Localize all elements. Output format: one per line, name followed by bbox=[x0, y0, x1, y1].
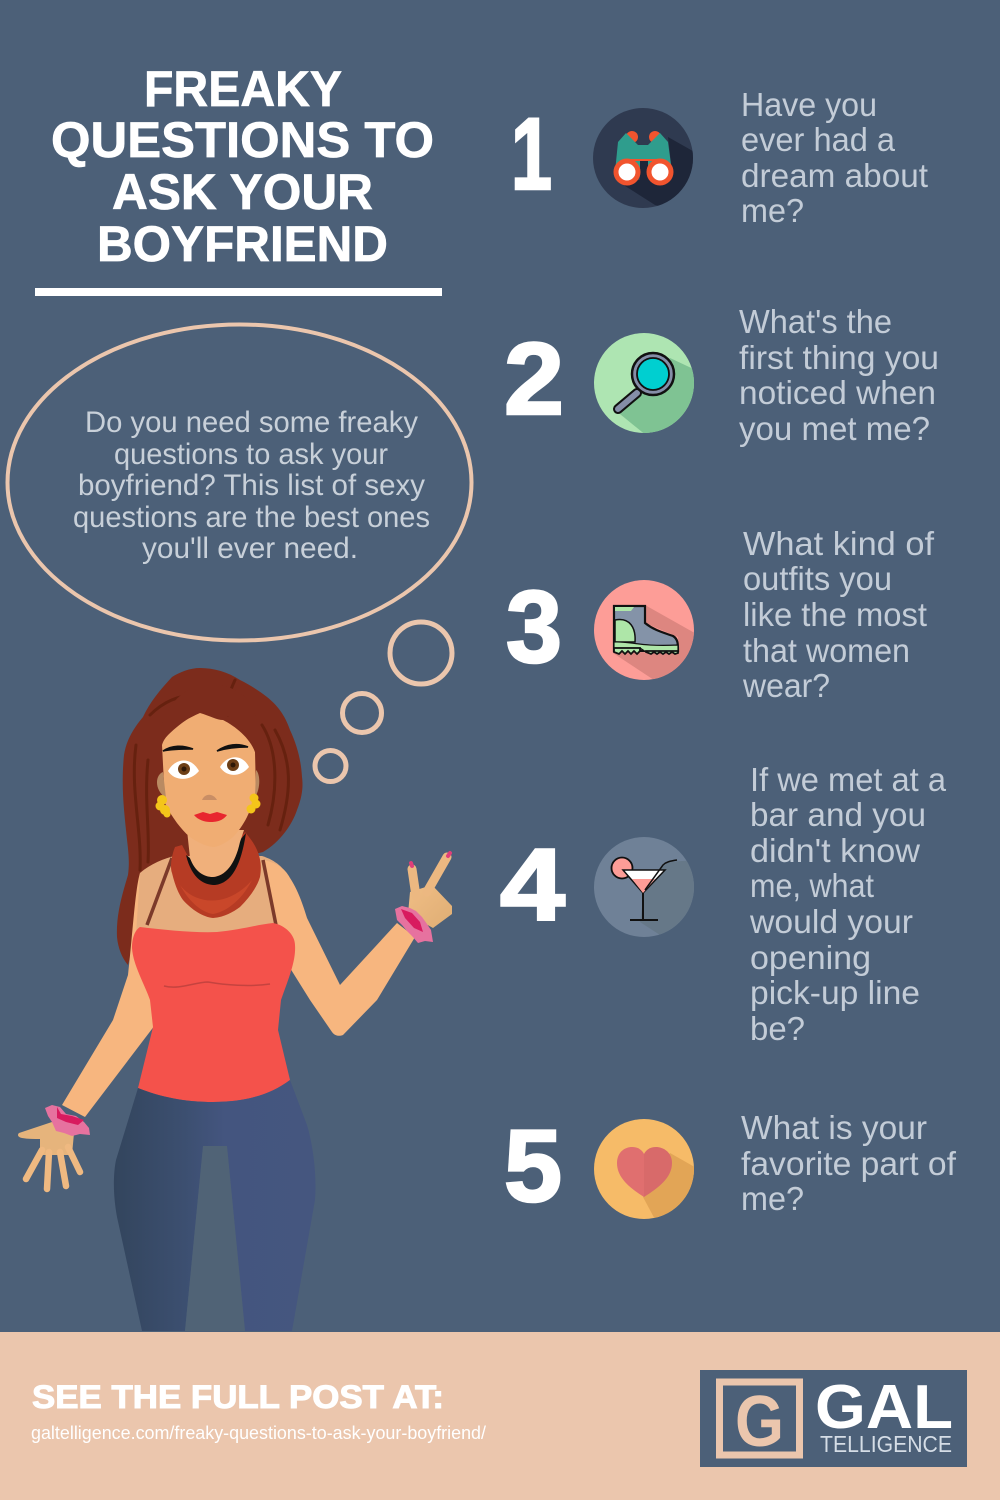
question 3 bbox=[742, 525, 935, 704]
scarf bbox=[171, 832, 261, 918]
left arm bbox=[62, 873, 165, 1117]
question 4: bar and you bbox=[750, 796, 926, 833]
logo: TELLIGENCE bbox=[820, 1431, 952, 1457]
question 2: first thing you bbox=[739, 339, 939, 376]
question 5 bbox=[741, 1109, 957, 1217]
number 1: 1 bbox=[511, 97, 552, 211]
question 4: opening bbox=[750, 939, 871, 976]
lips bbox=[194, 812, 227, 822]
question 4: didn't know bbox=[750, 832, 920, 869]
question 1: ever had a bbox=[741, 121, 896, 158]
logo: GAL bbox=[815, 1373, 953, 1442]
nails bbox=[411, 853, 450, 866]
question 3: What kind of bbox=[743, 525, 935, 562]
ears bbox=[157, 770, 259, 798]
icon: magnifying glass bbox=[594, 333, 694, 433]
item 2 bbox=[504, 303, 939, 447]
title: QUESTIONS TO bbox=[51, 112, 434, 168]
earrings bbox=[156, 794, 260, 818]
thought bubble with intro text: questions are the best ones bbox=[73, 501, 430, 534]
left hand bbox=[18, 1122, 80, 1189]
footer url: galtelligence.com/freaky-questions-to-ask-your-boyfriend/ bbox=[31, 1423, 486, 1443]
number 2: 2 bbox=[504, 322, 564, 436]
item 5 bbox=[506, 1115, 956, 1219]
nose bbox=[202, 795, 217, 800]
question 4: pick-up line bbox=[750, 974, 920, 1011]
title: BOYFRIEND bbox=[97, 216, 388, 272]
face bbox=[162, 713, 256, 847]
illustration: woman bbox=[18, 668, 452, 1331]
footer band bbox=[0, 1332, 1000, 1500]
thought bubble with intro text: boyfriend? This list of sexy bbox=[78, 469, 425, 502]
eyebrows bbox=[163, 745, 248, 751]
title: FREAKY bbox=[144, 61, 342, 117]
top bbox=[132, 923, 295, 1102]
question 4: me, what bbox=[750, 867, 874, 904]
question 2 bbox=[739, 303, 939, 447]
question 2: What's the bbox=[739, 303, 892, 340]
question 4 bbox=[749, 761, 947, 1047]
right hand bbox=[408, 857, 452, 928]
icon: cocktail bbox=[594, 837, 700, 940]
question 4: would your bbox=[749, 903, 913, 940]
black collar bbox=[186, 833, 246, 885]
hair shading bbox=[134, 680, 288, 870]
icon: heart bbox=[594, 1119, 694, 1219]
jeans bbox=[114, 1080, 316, 1331]
logo bbox=[700, 1370, 967, 1467]
number 5: 5 bbox=[504, 1109, 562, 1223]
icon: binoculars bbox=[593, 108, 693, 208]
left eye bbox=[168, 760, 199, 779]
hair back bbox=[117, 668, 302, 965]
question 1: Have you bbox=[741, 86, 877, 123]
question 4: If we met at a bbox=[750, 761, 947, 798]
question 3: outfits you bbox=[743, 560, 892, 597]
chest bbox=[135, 856, 300, 950]
thought bubble with intro text: you'll ever need. bbox=[142, 532, 358, 565]
icon: boot bbox=[594, 580, 700, 682]
logo: G bbox=[735, 1382, 784, 1462]
hair front bbox=[160, 684, 258, 752]
question 1: me? bbox=[741, 192, 804, 229]
question 2: noticed when bbox=[739, 374, 936, 411]
question 1 bbox=[741, 86, 928, 229]
title: ASK YOUR bbox=[112, 164, 373, 220]
question 3: wear? bbox=[742, 667, 830, 704]
thought bubble trail bbox=[315, 622, 452, 782]
scarf fold bbox=[180, 880, 252, 914]
number 3: 3 bbox=[506, 570, 562, 684]
thought bubble with intro text: questions to ask your bbox=[114, 438, 388, 471]
footer heading: SEE THE FULL POST AT: bbox=[32, 1379, 444, 1415]
question 5: favorite part of bbox=[741, 1145, 957, 1182]
right scrunchie bbox=[395, 906, 433, 943]
straps bbox=[147, 858, 276, 925]
question 5: What is your bbox=[741, 1109, 927, 1146]
item 3 bbox=[506, 525, 935, 704]
thought bubble with intro text: Do you need some freaky bbox=[85, 406, 418, 439]
question 1: dream about bbox=[741, 157, 928, 194]
question 5: me? bbox=[741, 1180, 804, 1217]
title bbox=[51, 61, 434, 272]
title underline bbox=[35, 288, 442, 296]
number 4: 4 bbox=[500, 828, 565, 942]
thought bubble with intro text bbox=[8, 324, 472, 640]
question 2: you met me? bbox=[739, 410, 930, 447]
left scrunchie bbox=[45, 1105, 90, 1136]
question 3: like the most bbox=[743, 596, 927, 633]
item 1 bbox=[514, 93, 928, 222]
item 4 bbox=[500, 761, 947, 1047]
neck bbox=[187, 830, 244, 877]
question 4: be? bbox=[750, 1010, 805, 1047]
question 3: that women bbox=[743, 632, 910, 669]
right arm bbox=[263, 860, 415, 1036]
right eye bbox=[220, 757, 249, 775]
